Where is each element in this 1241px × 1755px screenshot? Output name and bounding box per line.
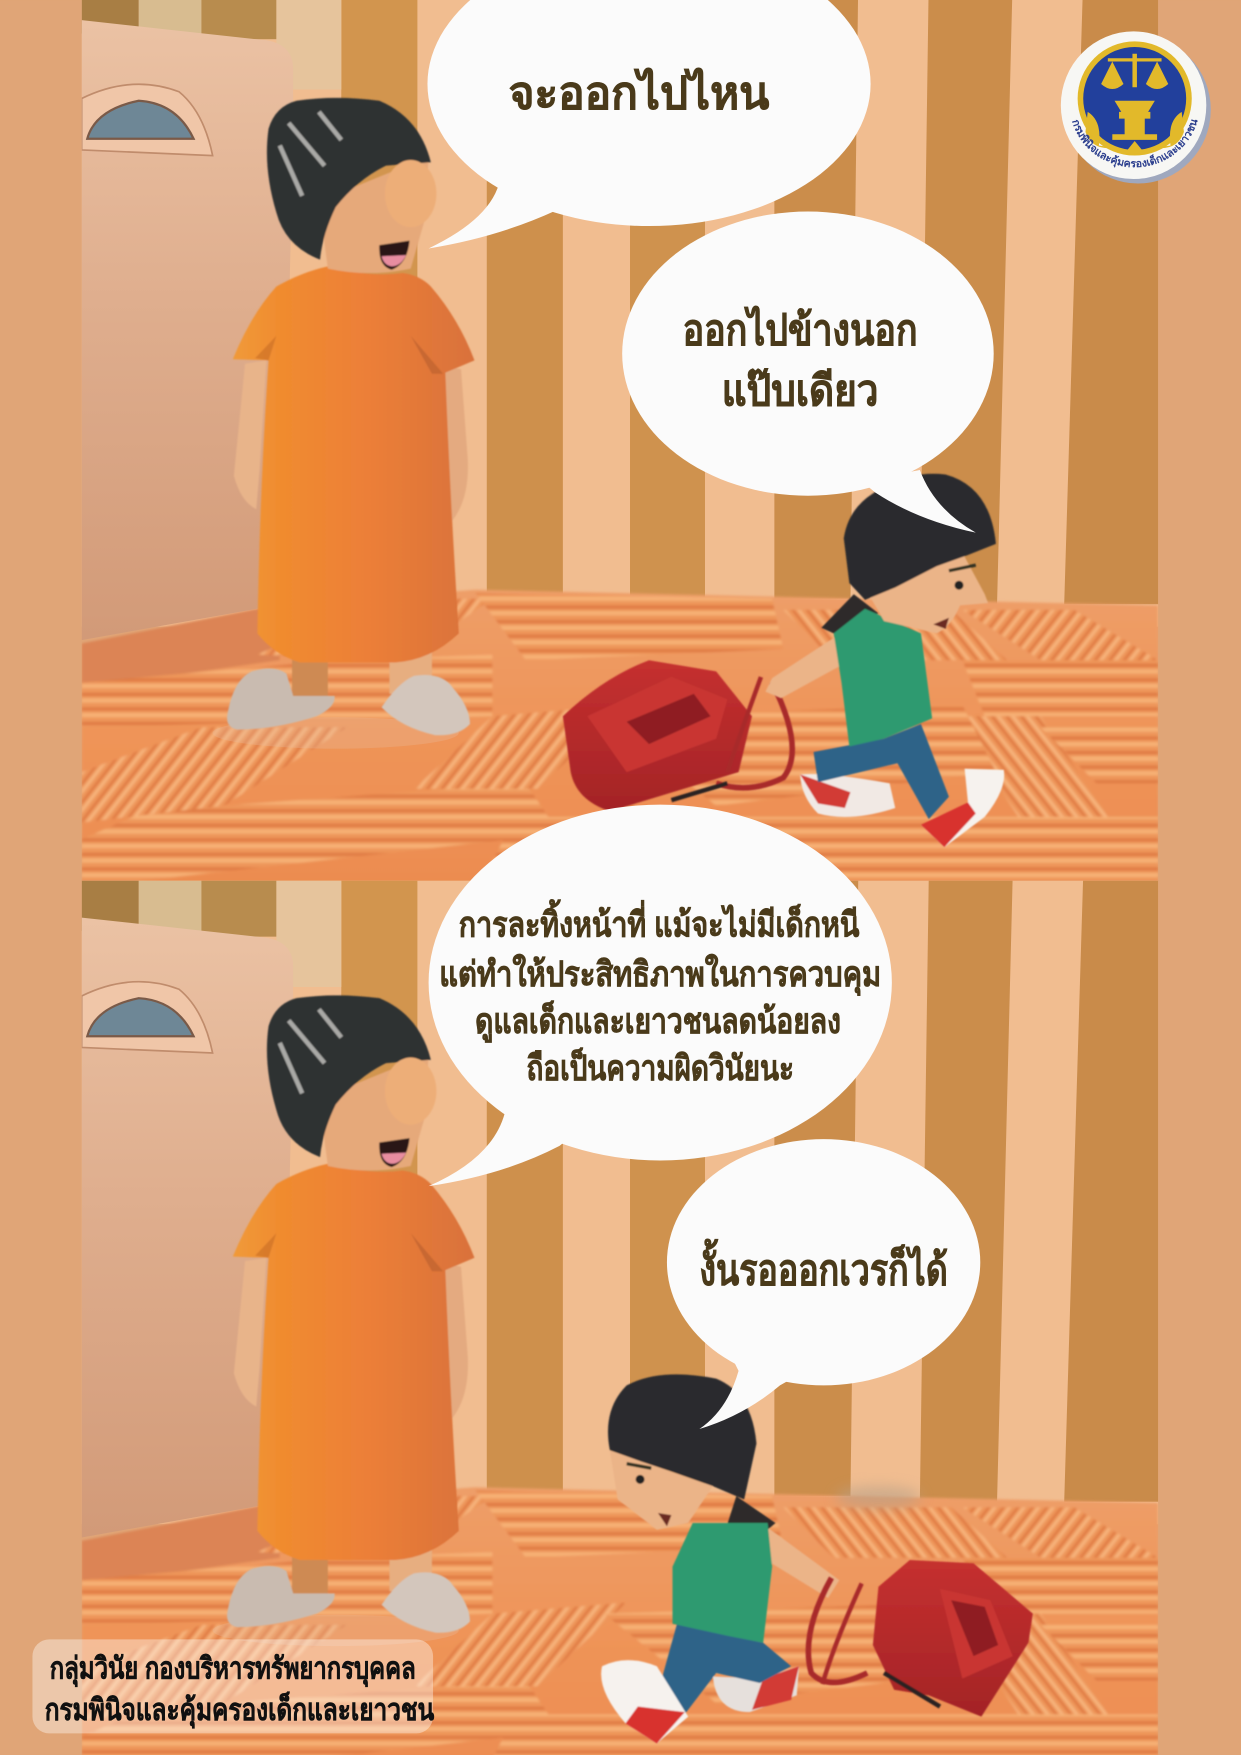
speech bubble: just stepping out: แป๊บเดียว [722, 367, 878, 415]
speech bubble: just stepping out [622, 212, 994, 533]
speech bubble: rule explanation [429, 805, 892, 1186]
speech bubble: rule explanation: ถือเป็นความผิดวินัยนะ [527, 1046, 794, 1088]
room and standing woman repeated [82, 875, 1158, 1755]
panel: top scene [82, 0, 1158, 884]
backpack dragged by the child [563, 660, 792, 811]
child walking left [601, 1374, 839, 1743]
room and standing woman in orange dress [82, 0, 1158, 884]
speech bubble: where are you going: จะออกไปไหน [509, 68, 770, 119]
footer credit box: กลุ่มวินัย กองบริหารทรัพยากรบุคคล [50, 1653, 416, 1688]
footer credit box: กรมพินิจและคุ้มครองเด็กและเยาวชน [45, 1691, 434, 1729]
logo: department seal: กรมพินิจและคุ้มครองเด็กและเยาวชน [1072, 119, 1198, 168]
footer credit box [32, 1639, 434, 1733]
speech bubble: just stepping out: ออกไปข้างนอก [683, 306, 918, 355]
blurred floor patch [836, 1486, 921, 1508]
speech bubble: where are you going [427, 0, 871, 248]
speech bubble: rule explanation: แต่ทำให้ประสิทธิภาพในการควบคุม [439, 953, 881, 996]
backpack behind the child [808, 1560, 1033, 1717]
speech bubble: rule explanation: การละทิ้งหน้าที่ แม้จะไม่มีเด็กหนี [459, 899, 860, 945]
speech bubble: rule explanation: ดูแลเด็กและเยาวชนลดน้อยลง [475, 999, 841, 1043]
speech bubble: then wait until off duty: งั้นรอออกเวรก็ได้ [699, 1239, 948, 1295]
child walking right [765, 474, 1004, 847]
speech bubble: then wait until off duty [667, 1139, 980, 1429]
panel: bottom scene [82, 875, 1158, 1755]
logo: department seal [1060, 31, 1211, 184]
